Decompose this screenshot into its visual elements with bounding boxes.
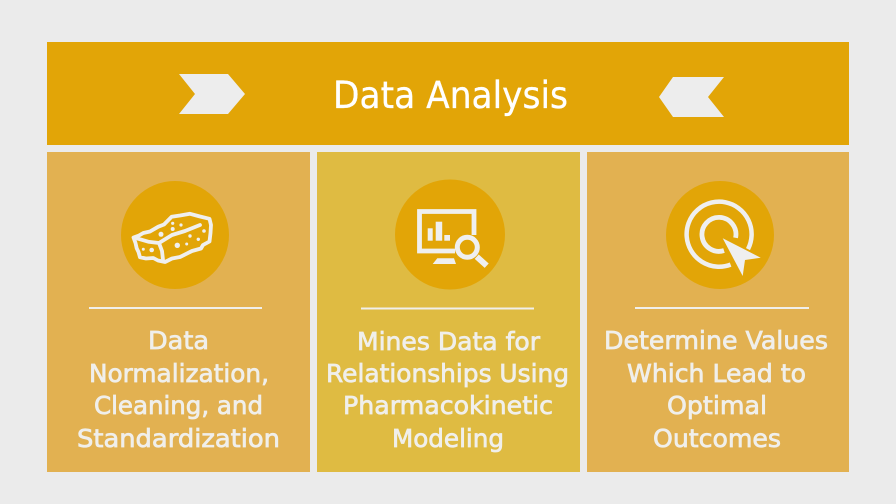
icon: rock in circle: [121, 181, 229, 289]
divider: [361, 308, 534, 310]
text: panel 3 label: Optimal: [667, 391, 767, 420]
title: Data Analysis: [333, 73, 568, 117]
text: panel 3 label: Determine Values: [604, 326, 828, 355]
text: panel 2 label: Relationships Using: [326, 359, 569, 388]
icon: monitor with magnifier in circle: [395, 180, 505, 290]
text: panel 2 label: [326, 327, 569, 453]
panel: header banner: [47, 42, 849, 145]
text: panel 1 label: Normalization,: [89, 359, 269, 388]
text: panel 3 label: [604, 326, 828, 453]
text: panel 3 label: Outcomes: [653, 424, 781, 453]
text: panel 1 label: [77, 326, 280, 453]
text: panel 1 label: Cleaning, and: [94, 391, 263, 420]
icon: right-pointing chevron: [179, 74, 245, 114]
text: panel 2 label: Pharmacokinetic: [343, 391, 553, 420]
text: panel 2 label: Modeling: [392, 424, 504, 453]
icon: left-pointing chevron: [659, 77, 724, 117]
text: panel 1 label: Standardization: [77, 424, 280, 453]
icon: target with cursor in circle: [666, 181, 774, 289]
panel: mines data: [317, 152, 580, 472]
text: panel 2 label: Mines Data for: [357, 327, 541, 356]
panel: determine values: [587, 152, 849, 472]
text: panel 1 label: Data: [148, 326, 209, 355]
divider: [89, 307, 262, 309]
text: panel 3 label: Which Lead to: [627, 359, 806, 388]
panel: data normalization: [47, 152, 310, 472]
divider: [635, 307, 809, 309]
